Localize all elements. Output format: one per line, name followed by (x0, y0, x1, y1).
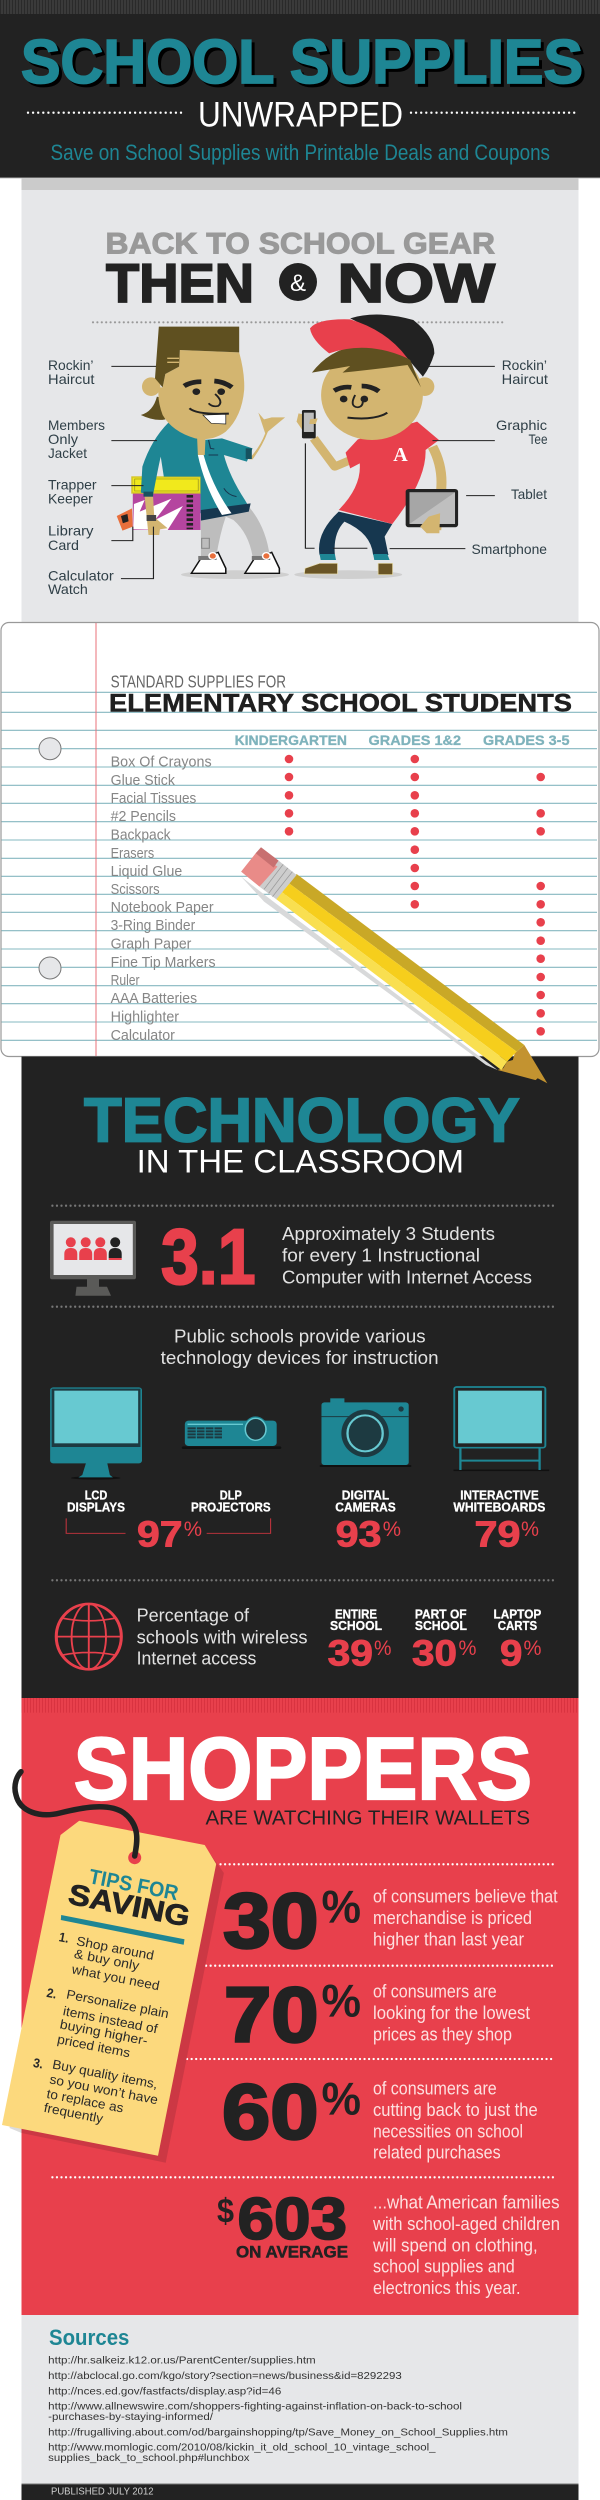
subtitle: unwrapped: UNWRAPPED (198, 96, 403, 135)
label: graphic tee: Tee (528, 431, 548, 447)
stat: 79 percent (474, 1514, 539, 1555)
icon: students (64, 1237, 122, 1260)
supply list: Liquid Glue (111, 864, 182, 880)
icon: pencil (241, 847, 547, 1083)
icon: globe (56, 1604, 121, 1669)
label: members only jacket: Members (48, 417, 105, 433)
text: 60 percent description (373, 2079, 538, 2163)
stat: 70 percent (224, 1970, 361, 2058)
text: 70 percent description (373, 1981, 530, 2045)
stat: part of school: 30 (412, 1633, 457, 1674)
text: wireless internet: Percentage of (137, 1606, 250, 1626)
stat: 60 percent: 60 (222, 2068, 319, 2156)
label: members only jacket: Only (48, 431, 78, 447)
device labels (67, 1487, 546, 1515)
header banner (0, 0, 600, 178)
stat: laptop carts: CARTS (498, 1618, 537, 1633)
subheading: watching wallets: ARE WATCHING THEIR WALLETS (206, 1806, 530, 1829)
heading: then and now: & (290, 270, 306, 297)
supply list: Box Of Crayons (111, 754, 212, 770)
panel: then and now (22, 178, 578, 623)
stat: part of school: SCHOOL (415, 1618, 467, 1633)
supply list: Highlighter (111, 1010, 179, 1026)
stat: 79 percent: 79 (474, 1514, 520, 1555)
label: graphic tee: Graphic (496, 417, 547, 433)
label: dlp projectors (191, 1487, 271, 1515)
label: library card: Library (48, 523, 94, 539)
icon: monitor with students (50, 1221, 136, 1296)
label: lcd displays: DISPLAYS (67, 1500, 125, 1515)
table heading: ELEMENTARY SCHOOL STUDENTS (109, 690, 572, 718)
label: calculator watch: Calculator (48, 568, 114, 584)
panel: notebook paper supplies table (1, 622, 599, 1056)
tip 1: & buy only (73, 1946, 141, 1973)
stat: 603 dollars on average: 603 (238, 2186, 347, 2252)
stat: laptop carts: LAPTOP (494, 1606, 542, 1621)
stat: 3.1: 3.1 (161, 1212, 256, 1300)
heading: sources: Sources (49, 2325, 129, 2350)
label: rockin haircut right (502, 357, 548, 387)
source links: http://frugalliving.about.com/od/bargainshopping/tp/Save_Money_on_School_Supplies.htm (48, 2426, 508, 2438)
tip 2: buying higher- (59, 2017, 149, 2048)
title: SCHOOL SUPPLIES (21, 28, 583, 97)
heading: then and now (106, 252, 495, 314)
text: 70 percent description: prices as they shop (373, 2025, 512, 2045)
label: calculator watch (48, 568, 114, 597)
label: trapper keeper: Trapper (48, 476, 97, 492)
stat: 93 percent (336, 1514, 401, 1555)
text: 30 percent description: higher than last year (373, 1929, 524, 1949)
label: calculator watch: Watch (48, 581, 88, 597)
label: library card: Card (48, 537, 79, 553)
icon: interactive whiteboard (453, 1387, 549, 1470)
text: students per computer (282, 1224, 532, 1287)
label: digital cameras: DIGITAL (342, 1487, 389, 1502)
tip 2: priced items (56, 2032, 132, 2060)
stat: entire school: % (374, 1637, 392, 1660)
text: students per computer: Computer with Internet Access (282, 1267, 532, 1287)
text: 60 percent description: related purchases (373, 2143, 501, 2163)
table heading: STANDARD SUPPLIES FOR (111, 672, 286, 692)
tip 3: Buy quality items, (51, 2057, 159, 2092)
stat: entire school: 39 (328, 1633, 373, 1674)
tip 1: what you need (70, 1961, 161, 1993)
icon: tag string (15, 1772, 137, 1856)
publication date: PUBLISHED JULY 2012 (51, 2486, 154, 2498)
text: american families spending: electronics this year. (373, 2278, 520, 2298)
dots: kindergarten (285, 755, 293, 836)
supply list: Calculator (111, 1028, 175, 1044)
supply list: Backpack (111, 828, 171, 844)
supply list (111, 754, 216, 1044)
stat: 70 percent: % (322, 1974, 361, 2026)
stat: 603 dollars on average (217, 2186, 348, 2262)
tip 2: items instead of (62, 2003, 159, 2036)
text: public schools intro: Public schools provide various (174, 1327, 426, 1347)
heading: in the classroom: IN THE CLASSROOM (137, 1144, 464, 1180)
callout: now labels (472, 357, 548, 557)
label: graphic tee (496, 417, 548, 447)
text: public schools intro: technology devices for instruction (161, 1348, 439, 1368)
label: tablet: Tablet (511, 486, 547, 502)
panel: sources (22, 2315, 578, 2484)
icon: digital camera (320, 1398, 411, 1467)
column headers (235, 733, 570, 748)
tip 3 (32, 2055, 159, 2126)
label: interactive whiteboards (453, 1487, 546, 1515)
stat: 30 percent (223, 1876, 361, 1964)
supply list: Glue Stick (111, 773, 176, 789)
stat: part of school (412, 1606, 476, 1674)
icon: binder holes (39, 738, 61, 979)
source links: http://abclocal.go.com/kgo/story?section=news/business&id=8292293 (48, 2370, 402, 2382)
illustration: modern student (294, 315, 458, 579)
tag heading: saving: SAVING (66, 1879, 193, 1934)
label: lcd displays (67, 1487, 125, 1515)
text: public schools intro (161, 1327, 439, 1368)
label: trapper keeper: Keeper (48, 490, 93, 506)
tip 1: 1. (58, 1929, 70, 1946)
text: american families spending: will spend on clothing, (372, 2235, 538, 2255)
tip 3: frequently (43, 2100, 105, 2126)
callout: then labels (48, 357, 114, 597)
stat: 60 percent: % (322, 2072, 361, 2124)
label: trapper keeper (48, 476, 97, 506)
heading: back to school gear: BACK TO SCHOOL GEAR (106, 228, 495, 261)
text: american families spending (372, 2192, 560, 2298)
stat: 97 percent: % (184, 1518, 202, 1541)
label: library card (48, 523, 94, 553)
text: 60 percent description: of consumers are (373, 2079, 497, 2099)
illustration: 80s student (117, 327, 289, 579)
label: members only jacket (48, 417, 105, 461)
supply list: 3-Ring Binder (111, 918, 195, 934)
label: interactive whiteboards: INTERACTIVE (460, 1487, 539, 1502)
text: 70 percent description: of consumers are (373, 1981, 497, 2001)
column headers: GRADES 3-5 (483, 733, 570, 748)
tip 2: Personalize plain (65, 1987, 170, 2021)
label: dlp projectors: PROJECTORS (191, 1500, 271, 1515)
heading: shoppers: SHOPPERS (74, 1719, 532, 1818)
stat: 603 dollars on average: $ (217, 2193, 234, 2231)
supply list: AAA Batteries (111, 991, 197, 1007)
stat: 93 percent: 93 (336, 1514, 382, 1555)
column headers: KINDERGARTEN (235, 733, 347, 748)
text: wireless internet: schools with wireless (137, 1627, 308, 1647)
stat: 30 percent: % (322, 1880, 361, 1932)
stat: laptop carts: 9 (500, 1633, 522, 1674)
icon: dlp projector (182, 1416, 281, 1449)
text: wireless internet (137, 1606, 308, 1669)
stat: laptop carts (494, 1606, 542, 1674)
heading: then and now: THEN (106, 252, 254, 314)
label: digital cameras: CAMERAS (335, 1500, 396, 1515)
table heading (109, 672, 572, 718)
tip 2: 2. (45, 1985, 58, 2002)
supply list: Facial Tissues (111, 791, 196, 807)
label: rockin haircut right: Rockin’ (502, 357, 547, 373)
graphic tee letter: A (393, 444, 408, 466)
text: students per computer: for every 1 Instructional (282, 1246, 480, 1266)
stat: part of school: PART OF (415, 1606, 467, 1621)
stat: 70 percent: 70 (224, 1970, 319, 2058)
label: rockin haircut: Rockin’ (48, 357, 94, 373)
supply list: Erasers (111, 846, 154, 862)
supply list: Ruler (111, 973, 140, 989)
stat: part of school: % (458, 1637, 476, 1660)
label: dlp projectors: DLP (220, 1487, 242, 1502)
footer (22, 2484, 578, 2500)
callout lines (111, 366, 495, 579)
supply list: Graph Paper (111, 936, 192, 952)
stat: laptop carts: % (524, 1637, 542, 1660)
column headers: GRADES 1&2 (368, 733, 461, 748)
text: american families spending: with school-aged children (372, 2214, 560, 2234)
tip 3: 3. (32, 2055, 45, 2072)
heading: then and now: NOW (338, 252, 495, 314)
label: lcd displays: LCD (85, 1487, 107, 1502)
text: 30 percent description: of consumers believe that (373, 1887, 558, 1907)
tag heading: tips for: TIPS FOR (87, 1865, 180, 1905)
callout: tips for saving price tag (2, 1772, 224, 2163)
label: rockin haircut (48, 357, 95, 387)
source links: supplies_back_to_school.php#lunchbox (48, 2452, 250, 2464)
panel: shoppers (22, 1698, 578, 2315)
heading: technology: TECHNOLOGY (84, 1086, 520, 1156)
text: 60 percent description: necessities on school (373, 2121, 523, 2141)
stat: 97 percent: 97 (137, 1514, 182, 1555)
bracket: shared 97 percent (66, 1518, 271, 1533)
title: SCHOOL SUPPLIES (24, 31, 586, 100)
text: wireless internet: Internet access (137, 1649, 256, 1669)
text: 30 percent description: merchandise is priced (373, 1908, 532, 1928)
text: 30 percent description (373, 1887, 558, 1949)
supply list: Fine Tip Markers (111, 955, 216, 971)
tip 1 (58, 1929, 161, 1993)
source links: http://www.allnewswire.com/shoppers-fighting-against-inflation-on-back-to-school (48, 2401, 462, 2413)
label: smartphone: Smartphone (472, 541, 547, 557)
supply list: Notebook Paper (111, 900, 214, 916)
stat: 30 percent: 30 (223, 1876, 319, 1964)
tip 3: to replace as (45, 2086, 125, 2116)
stat: 603 dollars on average: ON AVERAGE (236, 2243, 348, 2262)
label: members only jacket: Jacket (48, 445, 87, 461)
stat: entire school (328, 1606, 392, 1674)
text: 70 percent description: looking for the lowest (373, 2003, 530, 2023)
panel: technology in the classroom (22, 1056, 578, 1698)
stat: 97 percent (137, 1514, 202, 1555)
stat: entire school: SCHOOL (330, 1618, 382, 1633)
stat: entire school: ENTIRE (335, 1606, 377, 1621)
supply list: #2 Pencils (111, 809, 176, 825)
tip 2 (45, 1985, 170, 2060)
text: american families spending: ...what American families (373, 2192, 560, 2212)
source links (48, 2354, 508, 2464)
dots: grades 3 to 5 (536, 773, 545, 1036)
tip 3: so you won’t have (48, 2072, 159, 2107)
source links: http://hr.salkeiz.k12.or.us/ParentCenter/supplies.htm (48, 2354, 316, 2366)
tip 1: Shop around (75, 1933, 155, 1963)
icon: lcd display (50, 1387, 142, 1480)
label: interactive whiteboards: WHITEBOARDS (453, 1500, 546, 1515)
source links: -purchases-by-staying-informed/ (48, 2411, 213, 2423)
stat: 79 percent: % (521, 1518, 539, 1541)
label: digital cameras (335, 1487, 396, 1515)
dots: grades 1 and 2 (410, 755, 419, 909)
text: 60 percent description: cutting back to just the (373, 2100, 538, 2120)
source links: http://www.momlogic.com/2010/08/kickin_it_old_school_10_vintage_school_ (48, 2442, 436, 2454)
source links: http://nces.ed.gov/fastfacts/display.asp?id=46 (48, 2385, 281, 2397)
supply list: Scissors (111, 882, 160, 898)
text: students per computer: Approximately 3 Students (282, 1224, 495, 1244)
label: rockin haircut right: Haircut (502, 371, 548, 387)
text: american families spending: school supplies and (373, 2257, 515, 2277)
stat: 60 percent (222, 2068, 361, 2156)
label: rockin haircut: Haircut (48, 371, 95, 387)
stat: 93 percent: % (383, 1518, 401, 1541)
